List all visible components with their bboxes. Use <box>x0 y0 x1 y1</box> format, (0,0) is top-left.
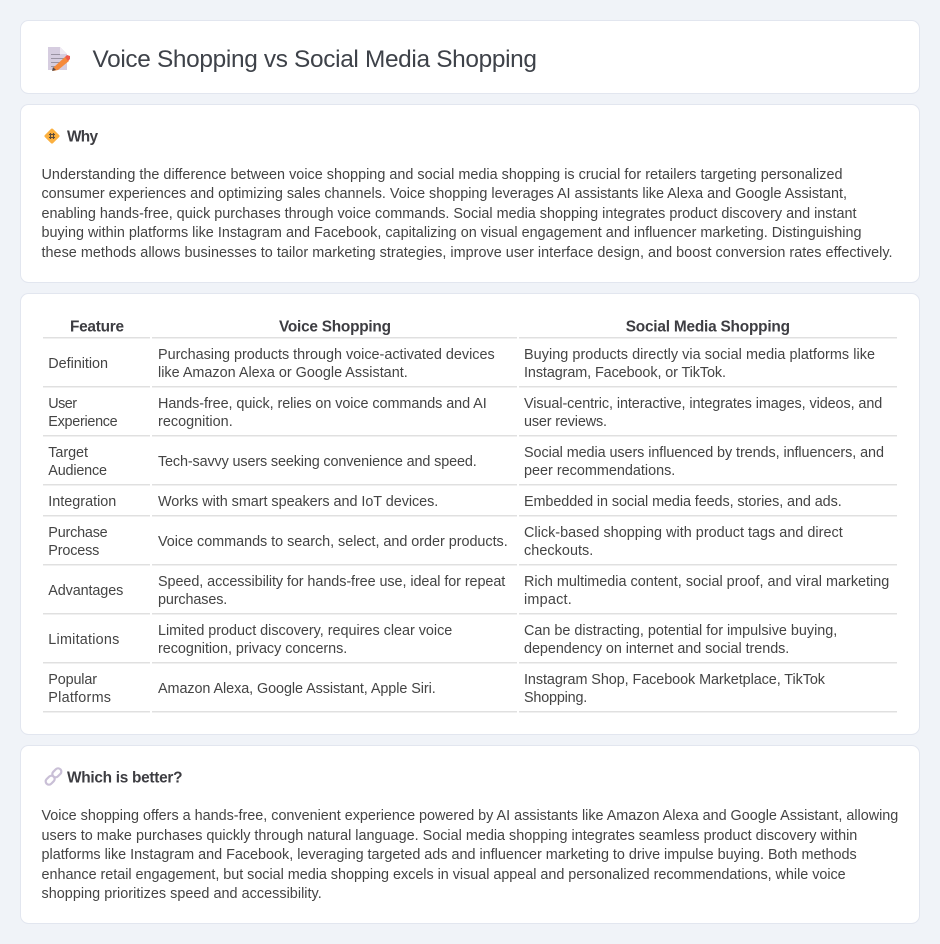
table row: definition: Instagram, Facebook, or TikTok. <box>524 365 726 381</box>
table row: limitations: Limited product discovery, requires clear voice <box>158 623 452 639</box>
text block: verdict: Voice shopping offers a hands-free, convenient experience powered by AI assistants like Amazon Alexa and Google Assistant, allowing <box>42 808 898 824</box>
table row: advantages: Advantages <box>48 583 123 599</box>
table row: popular platforms: Shopping. <box>524 690 587 706</box>
panel: title header <box>20 20 920 94</box>
icon: memo with pencil <box>48 47 70 71</box>
table header row <box>70 318 790 336</box>
table row: target audience: Tech-savvy users seeking convenience and speed. <box>158 454 477 470</box>
icon: warning diamond <box>44 128 60 144</box>
table row: purchase process: checkouts. <box>524 543 593 559</box>
table row: purchase process: Click-based shopping with product tags and direct <box>524 525 843 541</box>
table row: advantages: purchases. <box>158 592 227 608</box>
text block: verdict: enhance retail engagement, but social media shopping excels in visual appeal and personalized recommendations, while voice <box>42 867 846 883</box>
panel: comparison table <box>20 294 920 734</box>
table row: user experience: user reviews. <box>524 414 607 430</box>
table row: limitations: Limitations <box>48 632 119 648</box>
panel: which is better <box>20 746 920 924</box>
table row: definition: Definition <box>48 356 108 372</box>
text block: why explanation: buying within platforms like Instagram and Facebook, capitalizing on visual engagement and influencer marketing. Distinguishing <box>42 225 862 241</box>
table row: target audience: Social media users influenced by trends, influencers, and <box>524 445 884 461</box>
text block: why explanation: Understanding the difference between voice shopping and social media shopping is crucial for retailers targeting personalized <box>42 167 842 183</box>
text block: why explanation <box>42 167 892 261</box>
table row: user experience: Visual-centric, interactive, integrates images, videos, and <box>524 396 882 412</box>
table header row: Social Media Shopping <box>626 318 790 336</box>
table row: definition: Buying products directly via social media platforms like <box>524 347 875 363</box>
text block: why explanation: enabling hands-free, quick purchases through voice commands. Social media shopping integrates product discovery and instant <box>42 206 856 222</box>
table row: limitations: Can be distracting, potential for impulsive buying, <box>524 623 837 639</box>
table row: purchase process <box>48 525 843 559</box>
title: Voice Shopping vs Social Media Shopping <box>92 46 537 73</box>
table row: popular platforms: Amazon Alexa, Google Assistant, Apple Siri. <box>158 681 436 697</box>
heading: which is better: Which is better? <box>67 770 182 786</box>
text block: verdict: users to make purchases quickly through natural language. Social media shopping integrates seamless product discovery within <box>42 828 857 844</box>
text block: why explanation: these methods allows businesses to tailor marketing strategies, improve user interface design, and boost conversion rates effectively. <box>42 245 892 261</box>
table row: advantages: Rich multimedia content, social proof, and viral marketing <box>524 574 889 590</box>
table row: advantages: impact. <box>524 592 572 608</box>
text block: verdict <box>42 808 898 902</box>
table row: integration: Works with smart speakers and IoT devices. <box>158 494 438 510</box>
table row: purchase process: Process <box>48 543 99 559</box>
table row: target audience: peer recommendations. <box>524 463 675 479</box>
table row: user experience: recognition. <box>158 414 233 430</box>
table header row: Voice Shopping <box>279 318 391 336</box>
table row: purchase process: Voice commands to search, select, and order products. <box>158 534 508 550</box>
table row: advantages <box>48 574 889 608</box>
table row: definition: like Amazon Alexa or Google Assistant. <box>158 365 408 381</box>
text block: why explanation: consumer experiences and optimizing sales channels. Voice shopping leverages AI assistants like Alexa and Google Assistant, <box>42 186 847 202</box>
table row: target audience: Target <box>48 445 88 461</box>
table row: popular platforms: Platforms <box>48 690 111 706</box>
table row: limitations: recognition, privacy concerns. <box>158 641 347 657</box>
table row: definition: Purchasing products through voice-activated devices <box>158 347 495 363</box>
table row: user experience: Experience <box>48 414 118 430</box>
table row: user experience <box>48 396 882 430</box>
text block: verdict: platforms like Instagram and Facebook, leveraging targeted ads and influencer marketing to drive impulse buying. Both methods <box>42 847 857 863</box>
table row: popular platforms: Instagram Shop, Facebook Marketplace, TikTok <box>524 672 826 688</box>
table row: advantages: Speed, accessibility for hands-free use, ideal for repeat <box>158 574 505 590</box>
table row: limitations <box>48 623 837 657</box>
table row: popular platforms: Popular <box>48 672 97 688</box>
table header row: Feature <box>70 318 124 336</box>
icon: link <box>44 767 63 786</box>
table row: integration: Embedded in social media feeds, stories, and ads. <box>524 494 842 510</box>
table row: limitations: dependency on internet and social trends. <box>524 641 789 657</box>
table row: popular platforms <box>48 672 826 706</box>
table row: target audience: Audience <box>48 463 107 479</box>
table row: target audience <box>48 445 884 479</box>
heading: why: Why <box>67 128 98 146</box>
table row: purchase process: Purchase <box>48 525 108 541</box>
table row: user experience: User <box>48 396 77 412</box>
table row: integration: Integration <box>48 494 116 510</box>
table row: user experience: Hands-free, quick, relies on voice commands and AI <box>158 396 487 412</box>
table row: integration <box>48 494 842 510</box>
text block: verdict: shopping prioritizes speed and accessibility. <box>42 886 322 902</box>
table row: definition <box>48 347 875 381</box>
panel: why <box>20 104 920 282</box>
